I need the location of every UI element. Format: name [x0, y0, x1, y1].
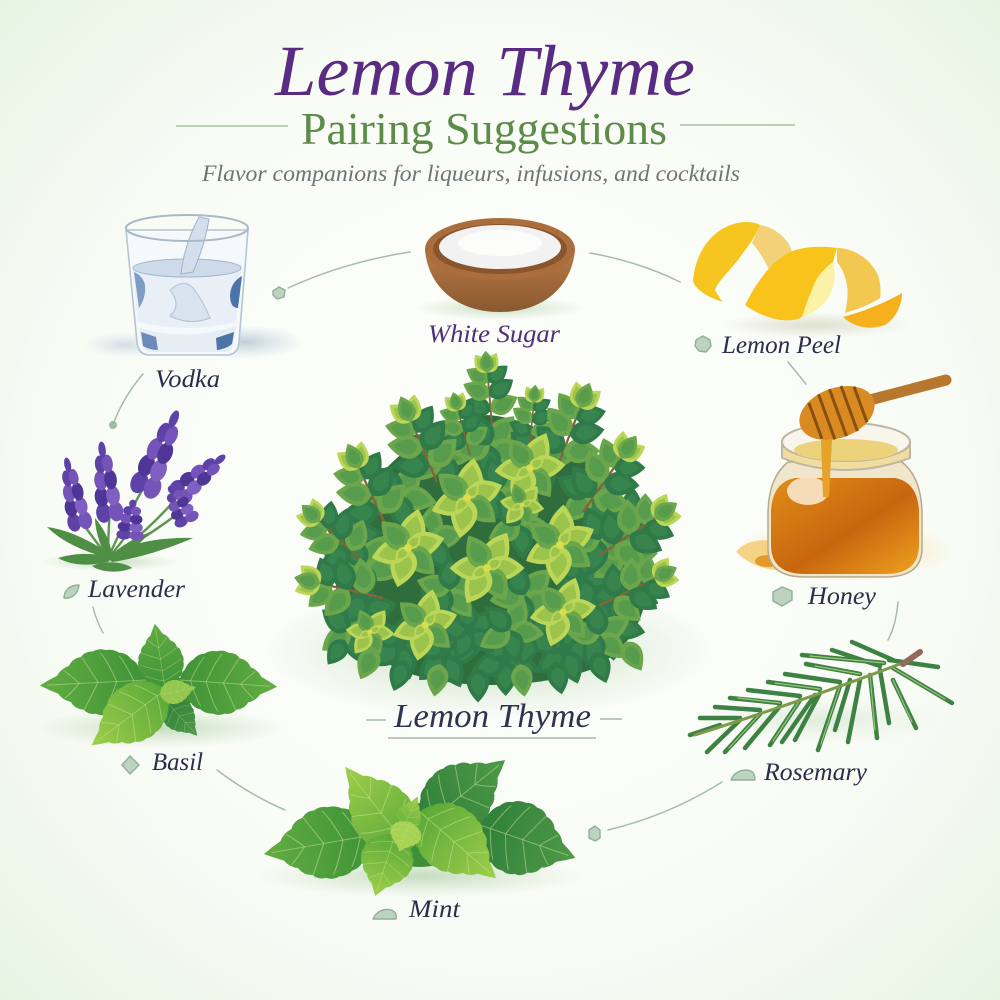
- item: lavender: [40, 404, 233, 603]
- title block: [176, 31, 795, 186]
- label: vodka: Vodka: [155, 366, 220, 393]
- label: lemon peel: Lemon Peel: [721, 332, 841, 359]
- item: white sugar: [415, 218, 585, 348]
- item: lemon peel: [693, 222, 910, 359]
- label: mint: Mint: [408, 896, 461, 923]
- label: white sugar: White Sugar: [428, 321, 560, 348]
- label: basil: Basil: [152, 749, 203, 776]
- connector arcs: [93, 252, 898, 830]
- item: rosemary: [690, 642, 952, 786]
- item: honey: [736, 376, 953, 610]
- label: lavender: Lavender: [87, 576, 185, 603]
- tagline: Flavor companions for liqueurs, infusions, and cocktails: [201, 161, 740, 186]
- item: mint: [255, 734, 587, 923]
- thyme sprigs: bright rosettes: [334, 418, 608, 668]
- title: Lemon Thyme: [274, 31, 695, 111]
- thyme sprigs: outer branches: [277, 348, 700, 638]
- label: rosemary: Rosemary: [763, 759, 868, 786]
- item: vodka glass: [83, 215, 303, 393]
- thyme foliage: bottom leaves: [320, 634, 651, 702]
- center label: [366, 698, 622, 738]
- subtitle: Pairing Suggestions: [301, 103, 667, 154]
- thyme foliage: base layer: [305, 391, 677, 711]
- small icons: [64, 287, 792, 919]
- label: honey: Honey: [807, 583, 877, 610]
- center: lemon thyme bush: [265, 348, 715, 738]
- center label: Lemon Thyme: [393, 698, 591, 735]
- item: basil: [35, 620, 285, 776]
